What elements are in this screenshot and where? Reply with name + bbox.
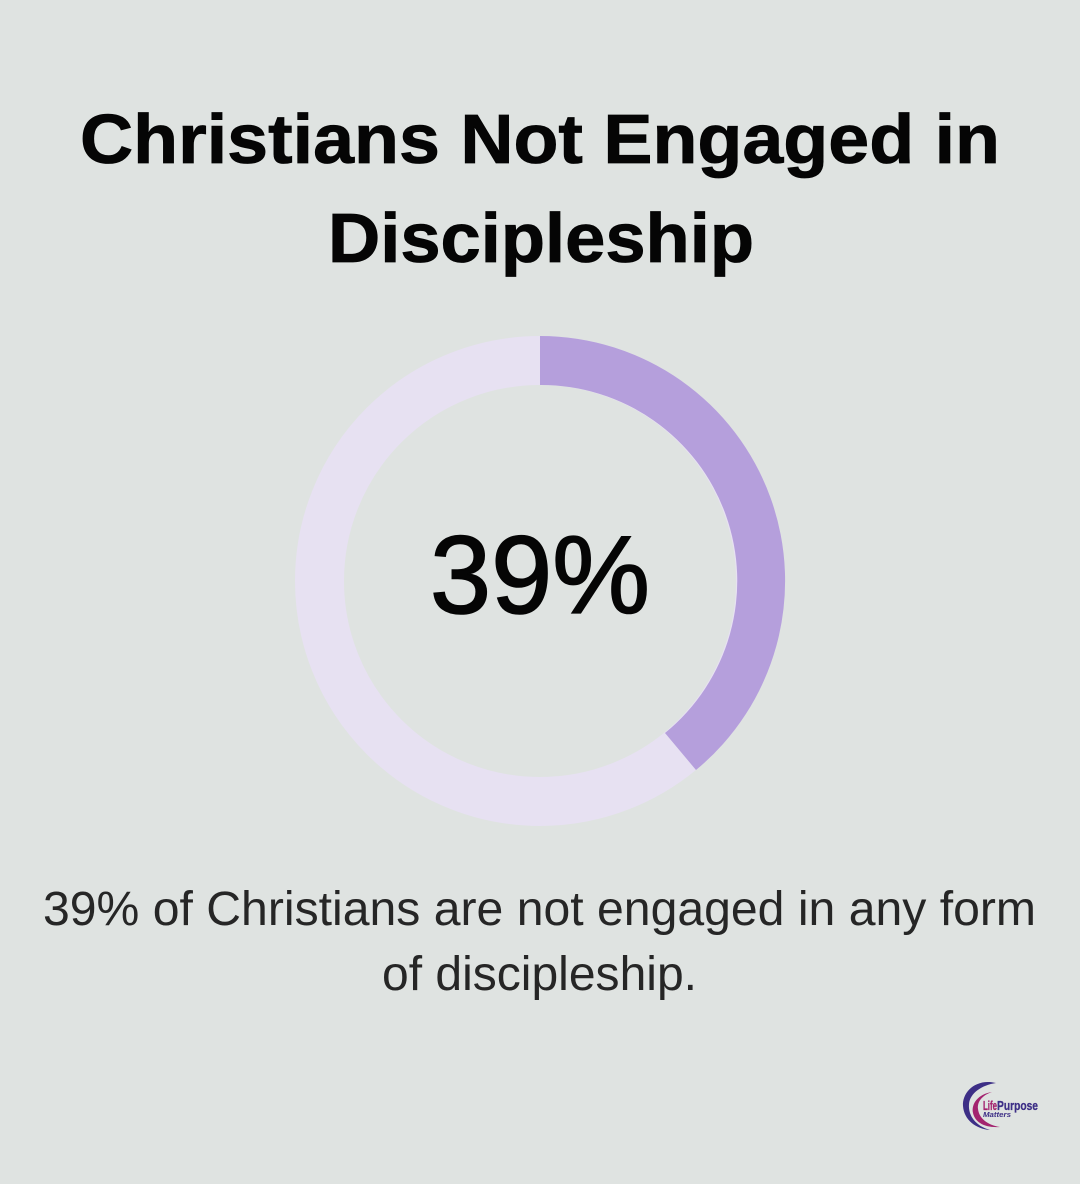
title: Christians Not Engaged in — [80, 100, 1000, 178]
title — [80, 100, 1000, 277]
description text: 39% of Christians are not engaged in any form — [43, 883, 1036, 936]
logo: Life Purpose Matters: Purpose — [997, 1098, 1038, 1113]
title: Discipleship — [328, 199, 754, 277]
donut chart: 39% — [320, 336, 785, 802]
logo: Life Purpose Matters — [963, 1082, 1038, 1130]
donut value label: 39% — [430, 514, 650, 637]
donut value arc — [540, 336, 785, 770]
logo inner arc — [973, 1092, 1000, 1127]
description text: of discipleship. — [382, 948, 697, 1001]
description text — [43, 883, 1036, 1001]
logo wordmark: Life — [983, 1098, 997, 1113]
donut track — [320, 360, 760, 802]
logo outer arc — [963, 1082, 996, 1130]
logo tagline: Matters — [983, 1112, 1011, 1119]
